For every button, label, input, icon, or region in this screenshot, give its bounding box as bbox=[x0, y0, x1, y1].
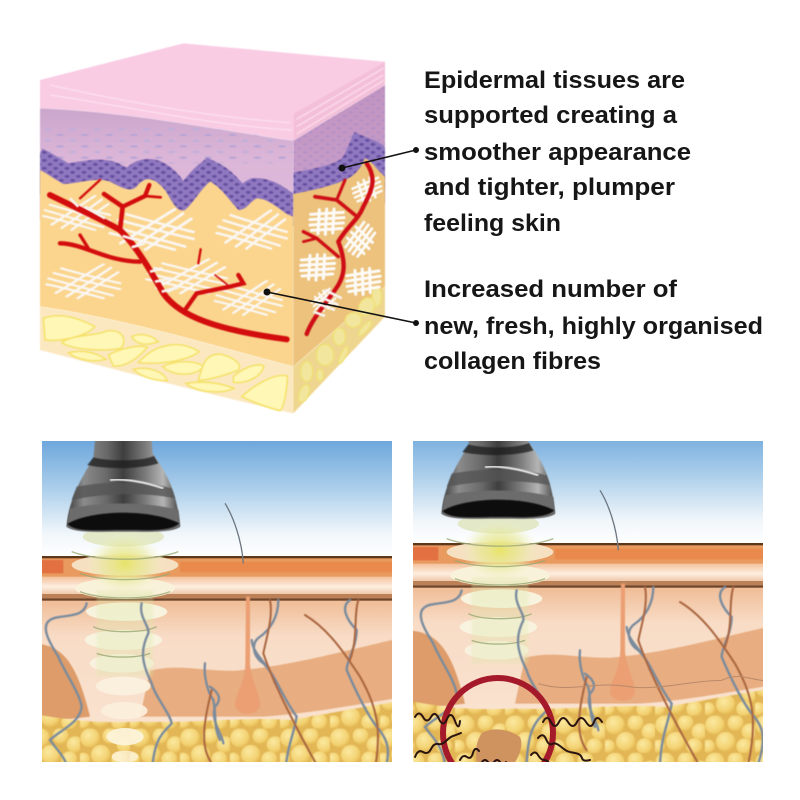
epidermis layer, front face bbox=[33, 108, 300, 220]
text block: collagen fibres: collagen fibres bbox=[424, 348, 601, 375]
hair shaft bbox=[225, 503, 243, 563]
text block: epidermal tissues: feeling skin bbox=[424, 210, 561, 237]
hair follicle bbox=[235, 597, 260, 714]
sky background bbox=[30, 440, 407, 557]
text block: collagen fibres: new, fresh, highly organised bbox=[424, 313, 763, 340]
epidermis layer, right face bbox=[292, 85, 386, 216]
text block: epidermal tissues bbox=[424, 67, 691, 237]
hair follicle bbox=[610, 584, 635, 701]
collagen fibres, right face bbox=[301, 175, 385, 315]
blood vessels, front face bbox=[50, 180, 287, 339]
collagen wrap on lower vessel bbox=[313, 290, 342, 316]
collagen fibres, front face bbox=[43, 196, 287, 315]
skin layers bbox=[30, 556, 407, 725]
text block: epidermal tissues: smoother appearance bbox=[424, 139, 691, 166]
nerves and vessels bbox=[421, 587, 763, 764]
collagen strands crossing vessels bbox=[70, 198, 178, 292]
panel: ultrasound treatment, left bbox=[42, 441, 392, 762]
callout leader: epidermis bbox=[338, 147, 419, 172]
focal ring bbox=[440, 675, 556, 762]
nerves and vessels bbox=[46, 600, 388, 777]
skin layers bbox=[405, 543, 782, 712]
device handpiece bbox=[67, 440, 180, 532]
text block: epidermal tissues: and tighter, plumper bbox=[424, 174, 675, 201]
top and front stratum corneum, pink bbox=[40, 43, 385, 141]
hair shaft bbox=[600, 490, 618, 550]
text block: collagen fibres: Increased number of bbox=[424, 276, 678, 303]
device handpiece bbox=[440, 441, 556, 520]
ultrasound beam bbox=[72, 527, 178, 677]
fat layer bbox=[413, 689, 763, 762]
treated area inside focal ring bbox=[476, 729, 522, 762]
sky background bbox=[413, 441, 763, 531]
text block: epidermal tissues: supported creating a bbox=[424, 102, 678, 129]
callout leader: collagen bbox=[264, 288, 419, 326]
ultrasound beam bbox=[447, 514, 553, 664]
panel: ultrasound treatment with focal point, right bbox=[413, 441, 763, 762]
subcutaneous fat layer bbox=[40, 287, 385, 413]
text block: epidermal tissues: Epidermal tissues are bbox=[424, 67, 685, 94]
thin horizontal vein bbox=[538, 677, 775, 688]
text block: collagen fibres bbox=[424, 276, 763, 375]
fat layer bbox=[42, 702, 392, 762]
dermis, front face bbox=[40, 170, 293, 367]
lower ultrasound beam bbox=[96, 677, 151, 763]
dermis, right face bbox=[293, 158, 385, 367]
blood vessels, right face bbox=[303, 163, 372, 334]
heat squiggles bbox=[415, 714, 602, 764]
panel: skin cross-section cube bbox=[33, 43, 392, 413]
